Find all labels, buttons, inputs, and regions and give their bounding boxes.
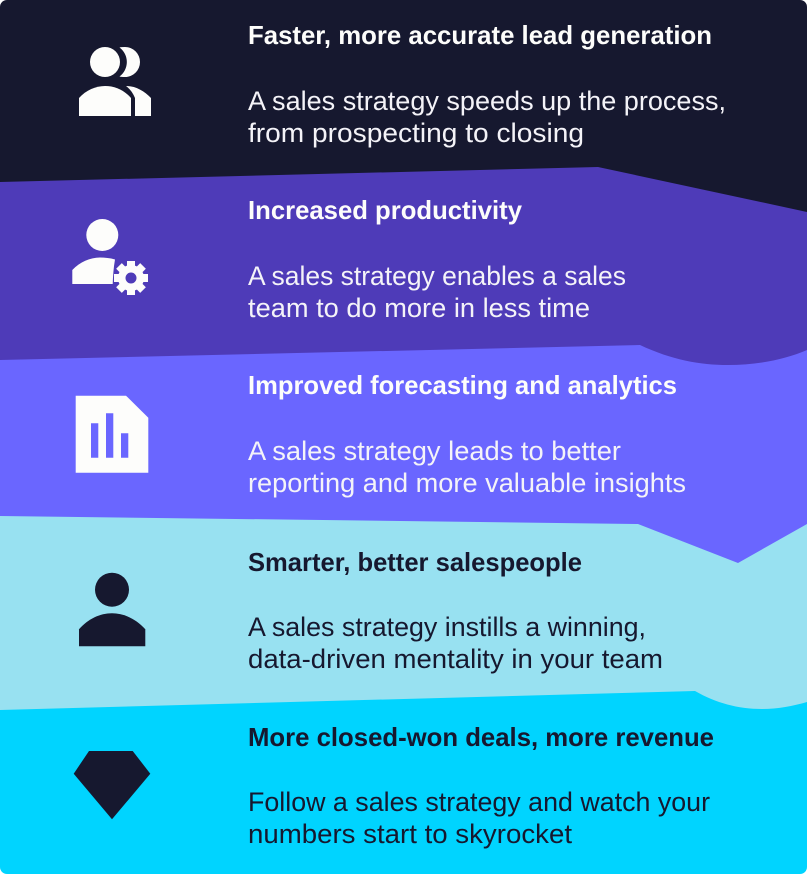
icon: two people [79,47,151,116]
body text: data-driven mentality in your team [248,644,663,674]
icon: person with gear [72,219,148,295]
section: lead generation [79,20,726,148]
heading: Increased productivity [248,195,523,225]
body text: from prospecting to closing [248,118,584,148]
icon: report document [76,396,148,473]
icon: diamond [74,751,150,819]
body text: reporting and more valuable insights [248,468,686,498]
body text: A sales strategy speeds up the process, [248,86,726,116]
body text: Follow a sales strategy and watch your [248,787,710,817]
section: forecasting [76,370,686,498]
band: forecasting [0,345,807,563]
band: lead generation [0,0,807,220]
band: salespeople [0,516,807,710]
body text: numbers start to skyrocket [248,819,573,849]
heading: Faster, more accurate lead generation [248,20,712,50]
heading: Smarter, better salespeople [248,547,582,577]
body text: A sales strategy enables a sales [248,261,626,291]
band: productivity [0,167,807,365]
heading: More closed-won deals, more revenue [248,722,714,752]
body text: A sales strategy instills a winning, [248,612,646,642]
section: salespeople [79,547,663,674]
heading: Improved forecasting and analytics [248,370,677,400]
body text: A sales strategy leads to better [248,436,621,466]
icon: person [79,573,145,646]
section: revenue [74,722,714,849]
body text: team to do more in less time [248,293,590,323]
section: productivity [72,195,626,323]
band: revenue [0,691,807,874]
